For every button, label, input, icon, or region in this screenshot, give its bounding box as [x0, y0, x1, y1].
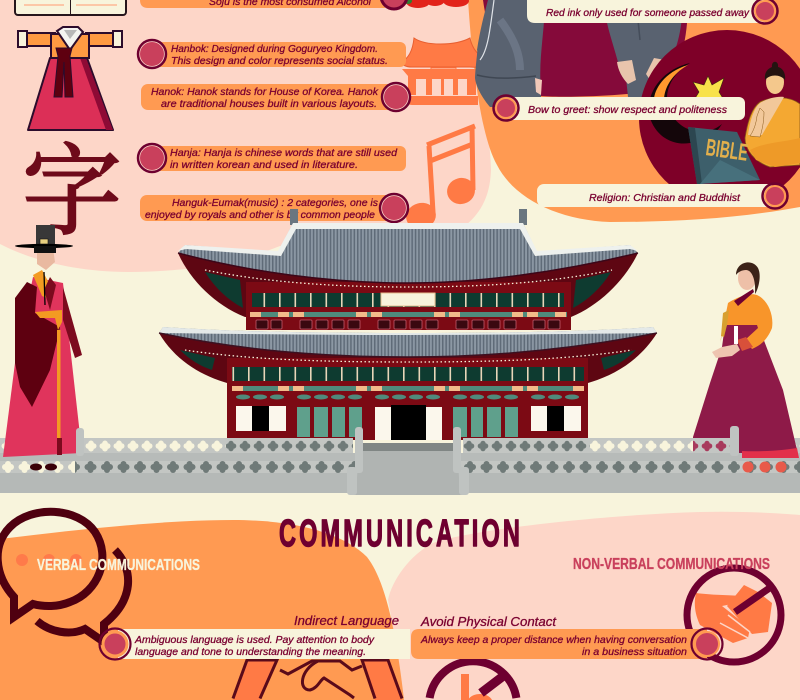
icon: no handshake — [687, 568, 781, 662]
indirect language block: Ambiguous language is used. Pay attention to body — [134, 634, 375, 646]
balustrades and stone base — [0, 427, 800, 495]
icon: orange house — [401, 38, 492, 105]
red ink row: Red ink only used for someone passed away — [546, 7, 750, 19]
hanbok row: This design and color represents social status. — [171, 55, 388, 67]
hanguk-eumak row: Hanguk-Eumak(music) : 2 categories, one is — [172, 197, 379, 209]
icon: bowing man left — [475, 0, 545, 107]
hanok row — [141, 83, 410, 111]
icon: book — [15, 0, 126, 15]
panel: etiquette orange background — [468, 0, 800, 222]
icon: speech bubbles — [0, 512, 128, 642]
avoid physical contact block: Avoid Physical Contact — [420, 614, 557, 629]
icon: hanbok dress — [18, 27, 122, 130]
icon: crescent — [649, 63, 722, 144]
panel: non-verbal communications pink background — [388, 512, 800, 700]
avoid physical contact block: in a business situation — [582, 646, 687, 658]
icon: no pointing — [430, 661, 516, 700]
hanguk-eumak row — [140, 194, 408, 222]
avoid physical contact block: Always keep a proper distance when having conversation — [420, 634, 687, 646]
balustrade post left — [76, 428, 84, 456]
heading: communication: COMMUNICATION — [279, 511, 523, 554]
hanok row: Hanok: Hanok stands for House of Korea. Hanok — [151, 86, 379, 98]
panel: verbal communications orange background — [0, 520, 404, 700]
maroon backdrop behind bowing men — [483, 0, 688, 97]
hanok row: are traditional houses built in various layouts. — [161, 98, 377, 110]
hanguk-eumak row: enjoyed by royals and other is by common people — [145, 209, 375, 221]
icon: bible: BIBLE — [704, 134, 750, 167]
soju row — [140, 0, 407, 9]
indirect language block — [100, 613, 410, 660]
hanbok row — [138, 40, 406, 68]
icon: bowing man right — [603, 0, 683, 97]
hanja row: in written korean and used in literature. — [170, 159, 358, 171]
figure: woman in hanbok — [693, 262, 799, 458]
religion maroon circle — [639, 30, 800, 206]
palace illustration — [159, 209, 657, 440]
icon: music note — [403, 126, 478, 232]
hanbok row: Hanbok: Designed during Goguryeo Kingdom. — [171, 43, 378, 55]
hanja row: Hanja: Hanja is chinese words that are still used — [170, 147, 398, 159]
icon: chili peppers — [404, 0, 469, 8]
indirect language block: Indirect Language — [294, 613, 399, 628]
icon: bible — [688, 127, 760, 184]
panel: traditions pink background — [0, 0, 491, 272]
red ink row — [527, 0, 778, 24]
figure: man in red hanbok — [3, 225, 82, 470]
bow row: Bow to greet: show respect and politeness — [528, 104, 728, 116]
balustrade in front of skirt — [693, 426, 786, 472]
bow row — [494, 96, 745, 120]
hanja row — [138, 144, 406, 172]
religion row: Religion: Christian and Buddhist — [589, 192, 741, 204]
indirect language block: language and tone to understanding the meaning. — [135, 646, 366, 658]
avoid physical contact block — [411, 614, 722, 660]
icon: hanja character: 字 — [22, 111, 122, 255]
icon: star — [693, 76, 724, 100]
icon: handshake — [233, 660, 402, 700]
dots inside speech bubble — [16, 554, 82, 566]
icon: buddha — [745, 62, 800, 167]
heading: verbal communications: VERBAL COMMUNICATIONS — [37, 557, 200, 574]
religion row — [537, 184, 788, 208]
